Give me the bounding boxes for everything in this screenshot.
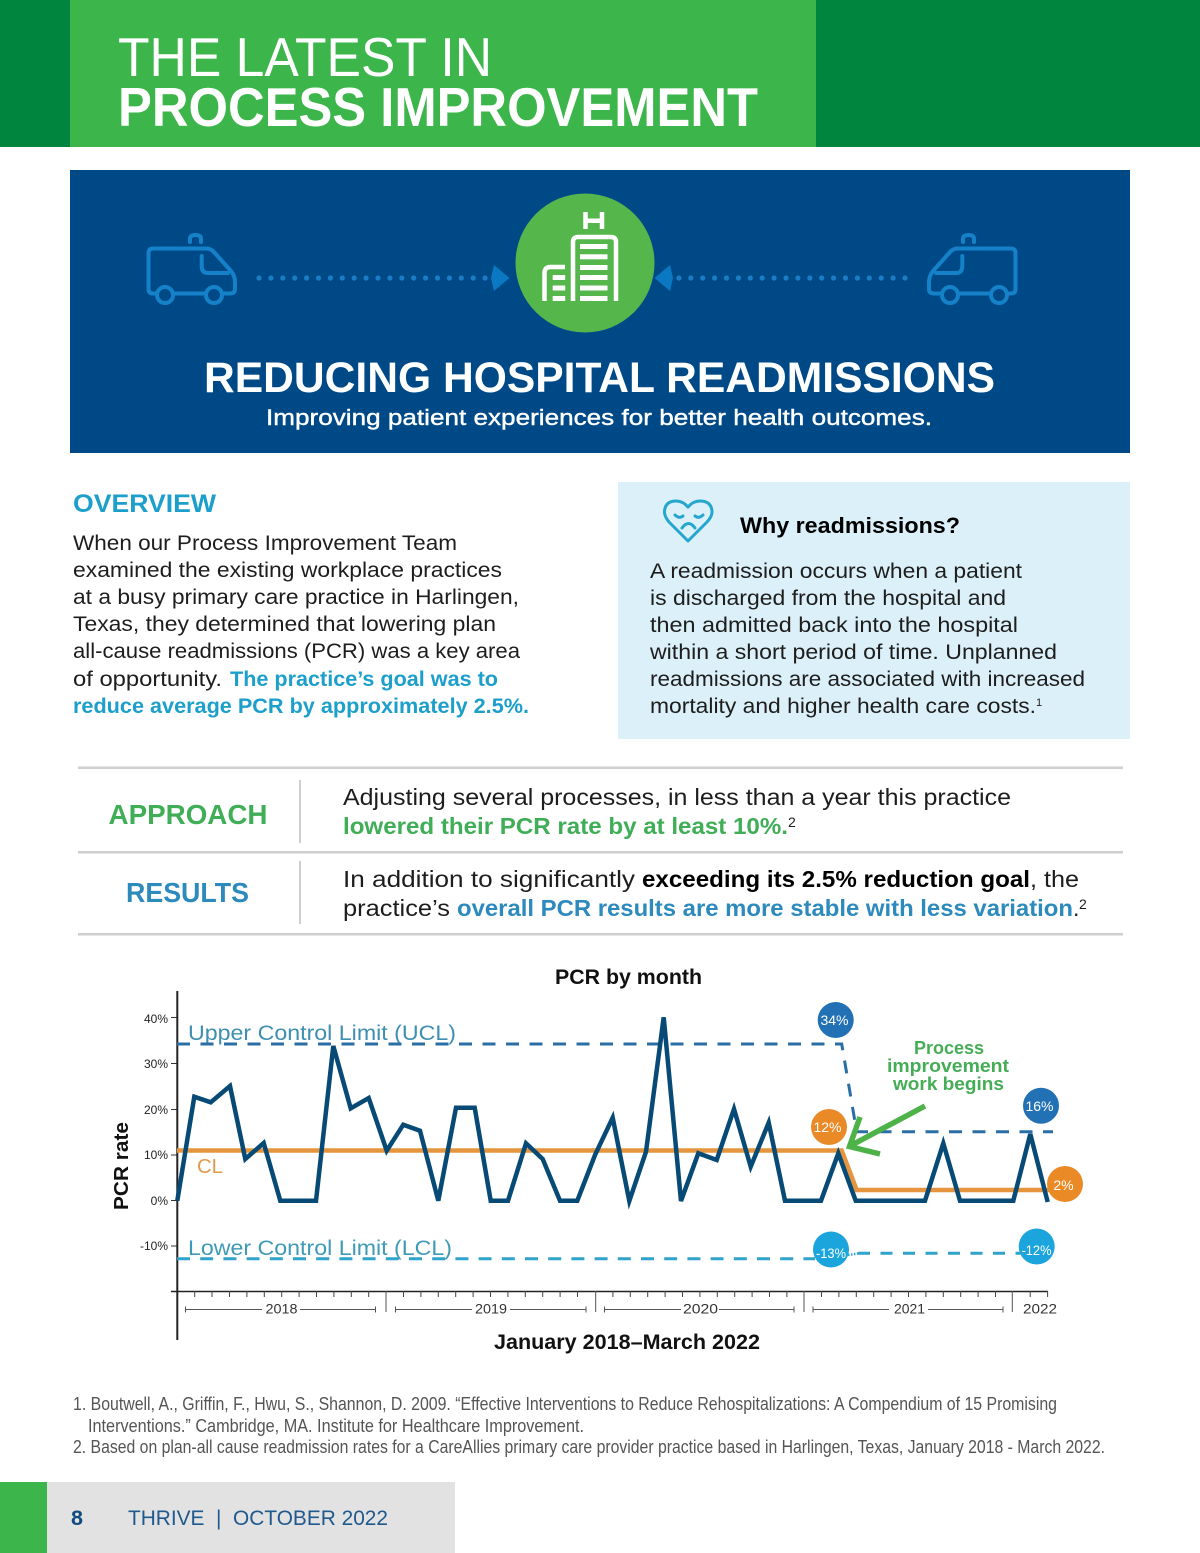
y axis title: PCR rate bbox=[111, 1122, 133, 1210]
why text: then admitted back into the hospital bbox=[650, 614, 1018, 637]
arrow: left dotted bbox=[256, 265, 510, 291]
icon: right ambulance bbox=[929, 235, 1016, 303]
header banner bbox=[0, 0, 1200, 147]
results text: exceeding its 2.5% reduction goal bbox=[642, 866, 1030, 892]
x axis year labels: 2021 bbox=[894, 1300, 925, 1316]
badge: -13% bbox=[813, 1232, 849, 1268]
why text: is discharged from the hospital and bbox=[650, 587, 1006, 610]
approach row bbox=[108, 784, 1011, 839]
overview text: When our Process Improvement Team bbox=[73, 532, 457, 555]
y axis labels bbox=[140, 1012, 168, 1253]
results text: practice’s bbox=[343, 895, 450, 921]
x axis year labels: 2018 bbox=[266, 1300, 298, 1316]
badge: 12%: 12% bbox=[813, 1119, 842, 1135]
badge: 12% bbox=[811, 1109, 847, 1145]
UCL line bbox=[177, 1044, 1053, 1132]
approach text: Adjusting several processes, in less than a year this practice bbox=[343, 784, 1011, 810]
why text: 1 bbox=[1036, 697, 1042, 709]
approach text bbox=[343, 784, 1011, 839]
CL line bbox=[177, 1150, 1050, 1190]
icon: hospital bbox=[516, 194, 654, 332]
overview text bbox=[73, 532, 529, 718]
footnotes: Interventions.” Cambridge, MA. Institute for Healthcare Improvement. bbox=[88, 1416, 584, 1436]
y axis labels: 0% bbox=[151, 1194, 168, 1208]
overview text: examined the existing workplace practices bbox=[73, 559, 502, 582]
LCL label: Lower Control Limit (LCL) bbox=[188, 1237, 452, 1260]
results text: , the bbox=[1030, 866, 1079, 892]
PCR data line bbox=[177, 1017, 1048, 1202]
why text: readmissions are associated with increased bbox=[650, 668, 1085, 691]
hero heading: REDUCING HOSPITAL READMISSIONS bbox=[204, 354, 995, 402]
why text: A readmission occurs when a patient bbox=[650, 560, 1022, 583]
footnotes: 1. Boutwell, A., Griffin, F., Hwu, S., Shannon, D. 2009. “Effective Interventions to Reduce Rehospitalizations: A Compendium of 15 Promising bbox=[73, 1394, 1057, 1414]
y axis labels: 40% bbox=[144, 1012, 168, 1026]
title: THE LATEST IN bbox=[118, 26, 492, 88]
callout: process improvement: work begins bbox=[892, 1074, 1004, 1094]
x axis title: January 2018–March 2022 bbox=[494, 1331, 760, 1354]
results label: RESULTS bbox=[126, 877, 249, 908]
chart title: PCR by month bbox=[555, 966, 702, 989]
overview text: all-cause readmissions (PCR) was a key area bbox=[73, 640, 520, 663]
badge: 16% bbox=[1023, 1088, 1059, 1124]
UCL label: Upper Control Limit (UCL) bbox=[188, 1022, 456, 1045]
results row bbox=[126, 866, 1087, 921]
x axis year labels: 2019 bbox=[475, 1300, 507, 1316]
badge: 34%: 34% bbox=[820, 1012, 849, 1028]
approach text: 2 bbox=[788, 814, 796, 830]
footnotes bbox=[73, 1394, 1105, 1457]
callout: process improvement: Process bbox=[914, 1038, 984, 1058]
results text: overall PCR results are more stable with less variation bbox=[457, 895, 1073, 921]
why heading: Why readmissions? bbox=[740, 513, 960, 538]
y axis labels: 10% bbox=[144, 1148, 168, 1162]
results text: 2 bbox=[1079, 896, 1087, 912]
results text: . bbox=[1073, 895, 1079, 921]
chart: PCR by month bbox=[111, 966, 1083, 1354]
arrow: process improvement bbox=[850, 1106, 925, 1154]
results text bbox=[343, 866, 1087, 921]
icon: sad heart bbox=[664, 501, 712, 541]
x axis year labels: 2022 bbox=[1023, 1300, 1057, 1316]
CL label: CL bbox=[197, 1156, 223, 1178]
overview text: reduce average PCR by approximately 2.5%. bbox=[73, 695, 529, 718]
badge: -12% bbox=[1019, 1228, 1055, 1264]
axes bbox=[171, 991, 1048, 1340]
publication: THRIVE | OCTOBER 2022 bbox=[128, 1507, 388, 1530]
why text: within a short period of time. Unplanned bbox=[649, 641, 1057, 664]
y axis labels: 20% bbox=[144, 1103, 168, 1117]
badge: -13%: -13% bbox=[816, 1245, 846, 1261]
badge: 34% bbox=[818, 1002, 854, 1038]
y axis labels: 30% bbox=[144, 1057, 168, 1071]
badge: 16%: 16% bbox=[1025, 1098, 1054, 1114]
y axis labels: -10% bbox=[140, 1239, 168, 1253]
page number: 8 bbox=[71, 1507, 83, 1530]
approach text: lowered their PCR rate by at least 10%. bbox=[343, 813, 788, 839]
hero subtitle: Improving patient experiences for better health outcomes. bbox=[266, 405, 932, 430]
LCL line bbox=[177, 1253, 1025, 1259]
footer bbox=[0, 1482, 455, 1553]
badge: 2%: 2% bbox=[1053, 1177, 1074, 1193]
callout: process improvement bbox=[887, 1038, 1009, 1094]
approach label: APPROACH bbox=[108, 799, 268, 830]
x axis year labels: 2020 bbox=[683, 1300, 718, 1316]
panel: why readmissions bbox=[618, 482, 1130, 739]
title bbox=[118, 26, 758, 138]
panel: hero bbox=[70, 170, 1130, 453]
arrow: right dotted bbox=[654, 265, 908, 291]
callout: process improvement: improvement bbox=[887, 1056, 1009, 1076]
overview text: at a busy primary care practice in Harlingen, bbox=[73, 586, 519, 609]
badge: -12%: -12% bbox=[1022, 1242, 1052, 1258]
badge: 2% bbox=[1047, 1166, 1083, 1202]
why text: mortality and higher health care costs. bbox=[650, 695, 1036, 718]
overview text: of opportunity. bbox=[73, 668, 222, 691]
why text bbox=[649, 560, 1085, 718]
overview text: The practice’s goal was to bbox=[230, 668, 498, 691]
icon: left ambulance bbox=[148, 235, 235, 303]
overview heading: OVERVIEW bbox=[73, 490, 216, 518]
overview text: Texas, they determined that lowering plan bbox=[73, 613, 496, 636]
results text: In addition to significantly bbox=[343, 866, 636, 892]
title: PROCESS IMPROVEMENT bbox=[118, 76, 758, 138]
x axis year labels bbox=[266, 1300, 1057, 1316]
